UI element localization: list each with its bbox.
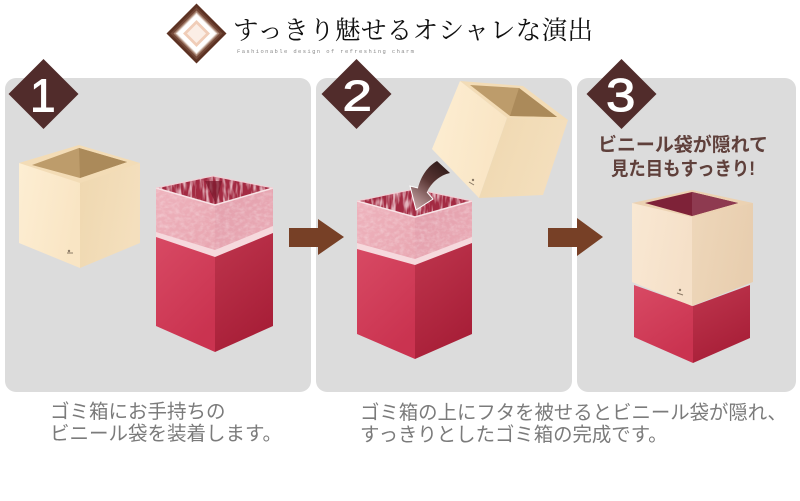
panel: step 2 background	[316, 78, 572, 392]
arrow: step 2 to step 3	[548, 218, 603, 256]
caption: step 1	[50, 401, 282, 445]
step 3 heading	[598, 133, 768, 180]
step 1 badge	[8, 59, 78, 129]
finished bin with wooden cover, step 3	[632, 190, 753, 363]
wooden cover, step 1	[19, 145, 140, 268]
step 2 badge	[322, 59, 392, 129]
title: すっきり魅せるオシャレな演出	[233, 16, 593, 45]
wooden cover tilted, step 2	[432, 81, 568, 198]
caption: step 2 and 3: すっきりとしたゴミ箱の完成です。	[360, 424, 668, 446]
step 1 badge: 1	[30, 70, 56, 122]
subtitle: Fashionable design of refreshing charm	[237, 48, 415, 55]
arrow: curved drop arrow onto bin	[410, 161, 450, 210]
red bin with plastic bag, step 1	[156, 176, 273, 352]
caption: step 2 and 3	[360, 402, 787, 446]
step 2 badge: 2	[342, 72, 372, 120]
panel: step 1 background	[5, 78, 311, 392]
step 3 heading: 見た目もすっきり!	[611, 158, 755, 180]
icon: title emblem diamond	[166, 4, 226, 64]
red bin with plastic bag, step 2	[357, 189, 472, 359]
caption: step 2 and 3: ゴミ箱の上にフタを被せるとビニール袋が隠れ、	[360, 402, 787, 424]
caption: step 1: ゴミ箱にお手持ちの	[50, 401, 226, 423]
arrow: step 1 to step 2	[289, 219, 344, 255]
caption: step 1: ビニール袋を装着します。	[50, 423, 282, 445]
step 3 badge	[586, 59, 656, 129]
panel: step 3 background	[577, 78, 796, 392]
step 3 badge: 3	[606, 69, 635, 121]
step 3 heading: ビニール袋が隠れて	[598, 133, 768, 156]
